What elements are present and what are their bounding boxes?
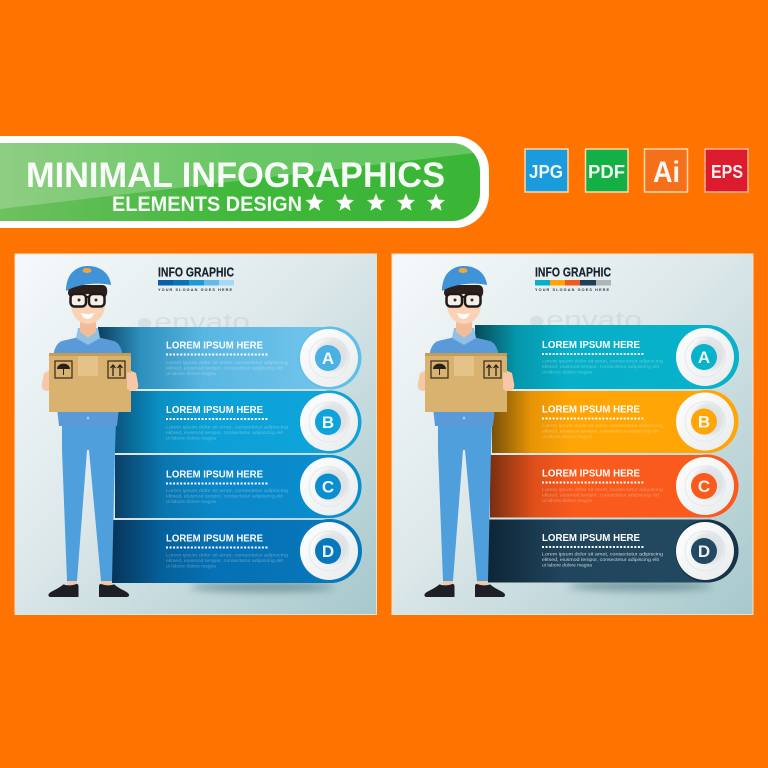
bar D — [488, 520, 739, 582]
panel: blue infographic — [15, 254, 376, 614]
bar C: Lorem ipsum dolor sit amet, consectetur adipiscing — [166, 488, 289, 493]
bar A: ut labore dolore magna — [166, 371, 217, 376]
badge: JPG: JPG — [529, 162, 563, 182]
bar A: A — [698, 348, 710, 367]
bar B: Lorem ipsum dolor sit amet, consectetur adipiscing — [166, 424, 289, 430]
bar C: C — [322, 478, 334, 496]
bar B: B — [322, 413, 334, 432]
bar B: Lorem ipsum dolor sit amet, consectetur adipiscing — [542, 423, 664, 428]
bar C: Lorem ipsum dolor sit amet, consectetur adipiscing — [542, 487, 664, 492]
bar B: ut labore dolore magna — [166, 436, 217, 440]
bar C: ut labore dolore magna — [166, 499, 217, 504]
bar A: ut labore dolore magna — [542, 370, 593, 374]
bar D: LOREM IPSUM HERE — [166, 534, 263, 544]
parcel box — [49, 353, 131, 412]
bar B: LOREM IPSUM HERE — [166, 405, 263, 416]
character: delivery man — [42, 266, 138, 597]
shadow under bars — [190, 582, 334, 592]
bar C: elitsed, eiusmod tempor, consectetur adipiscing elit — [166, 494, 284, 498]
bar B: elitsed, eiusmod tempor, consectetur adipiscing elit — [542, 428, 660, 434]
bar D — [112, 519, 362, 583]
bar A: Lorem ipsum dolor sit amet, consectetur adipiscing — [542, 358, 664, 364]
bar C: elitsed, eiusmod tempor, consectetur adipiscing elit — [542, 492, 660, 498]
badge: EPS: EPS — [711, 162, 743, 182]
title banner — [0, 136, 489, 228]
palette bar — [158, 280, 234, 286]
bar A: Lorem ipsum dolor sit amet, consectetur adipiscing — [166, 360, 289, 365]
bar C: LOREM IPSUM HERE — [166, 470, 263, 480]
bar D: D — [322, 542, 334, 561]
bar C: ut labore dolore magna — [542, 498, 593, 503]
watermark: ●envato — [135, 309, 250, 336]
shadow under bars — [568, 581, 712, 591]
bar B: LOREM IPSUM HERE — [542, 404, 640, 416]
bar C: C — [698, 477, 710, 496]
heading: info graphic: INFO GRAPHIC — [535, 266, 611, 280]
badge: PDF — [586, 149, 628, 192]
bar D: Lorem ipsum dolor sit amet, consectetur adipiscing — [542, 552, 664, 556]
bar B: elitsed, eiusmod tempor, consectetur adipiscing elit — [166, 430, 284, 435]
heading: info graphic: YOUR SLOGAN GOES HERE — [158, 288, 232, 292]
bar D: elitsed, eiusmod tempor, consectetur adipiscing elit — [542, 557, 660, 562]
bar A: elitsed, eiusmod tempor, consectetur adipiscing elit — [166, 366, 284, 370]
bar D: elitsed, eiusmod tempor, consectetur adipiscing elit — [166, 558, 284, 563]
parcel box — [425, 353, 507, 412]
bar A: elitsed, eiusmod tempor, consectetur adipiscing elit — [542, 364, 660, 369]
bar D: Lorem ipsum dolor sit amet, consectetur adipiscing — [166, 552, 289, 558]
character: delivery man — [418, 266, 514, 597]
badge: PDF: PDF — [588, 162, 625, 182]
bar A: LOREM IPSUM HERE — [166, 340, 263, 352]
subtitle text: ELEMENTS DESIGN — [112, 193, 302, 216]
heading: info graphic — [535, 266, 611, 292]
bar C — [115, 455, 362, 518]
format badges — [525, 149, 748, 192]
rating stars — [305, 194, 445, 211]
bar B: B — [698, 412, 710, 432]
heading: info graphic: YOUR SLOGAN GOES HERE — [535, 288, 609, 292]
bar A: A — [322, 349, 334, 368]
bar D: LOREM IPSUM HERE — [542, 533, 640, 544]
bar C — [490, 454, 738, 518]
bar C: LOREM IPSUM HERE — [542, 468, 640, 480]
bar D: ut labore dolore magna — [166, 564, 217, 568]
bar D: D — [698, 542, 710, 561]
bar A — [98, 326, 362, 390]
bar B: ut labore dolore magna — [542, 434, 593, 439]
heading: info graphic — [158, 266, 234, 292]
badge: Ai — [644, 149, 688, 192]
palette bar — [535, 280, 611, 286]
badge: EPS — [705, 149, 748, 192]
heading: info graphic: INFO GRAPHIC — [158, 266, 234, 280]
bar A: LOREM IPSUM HERE — [542, 340, 640, 351]
title text: MINIMAL INFOGRAPHICS — [26, 156, 445, 195]
bar A — [475, 325, 739, 389]
bar B — [492, 390, 738, 453]
panel: colour infographic — [392, 254, 753, 614]
badge: JPG — [525, 149, 568, 192]
bar B — [108, 390, 362, 454]
badge: Ai: Ai — [653, 156, 680, 189]
watermark: ●envato — [527, 307, 642, 334]
bar D: ut labore dolore magna — [542, 562, 593, 568]
